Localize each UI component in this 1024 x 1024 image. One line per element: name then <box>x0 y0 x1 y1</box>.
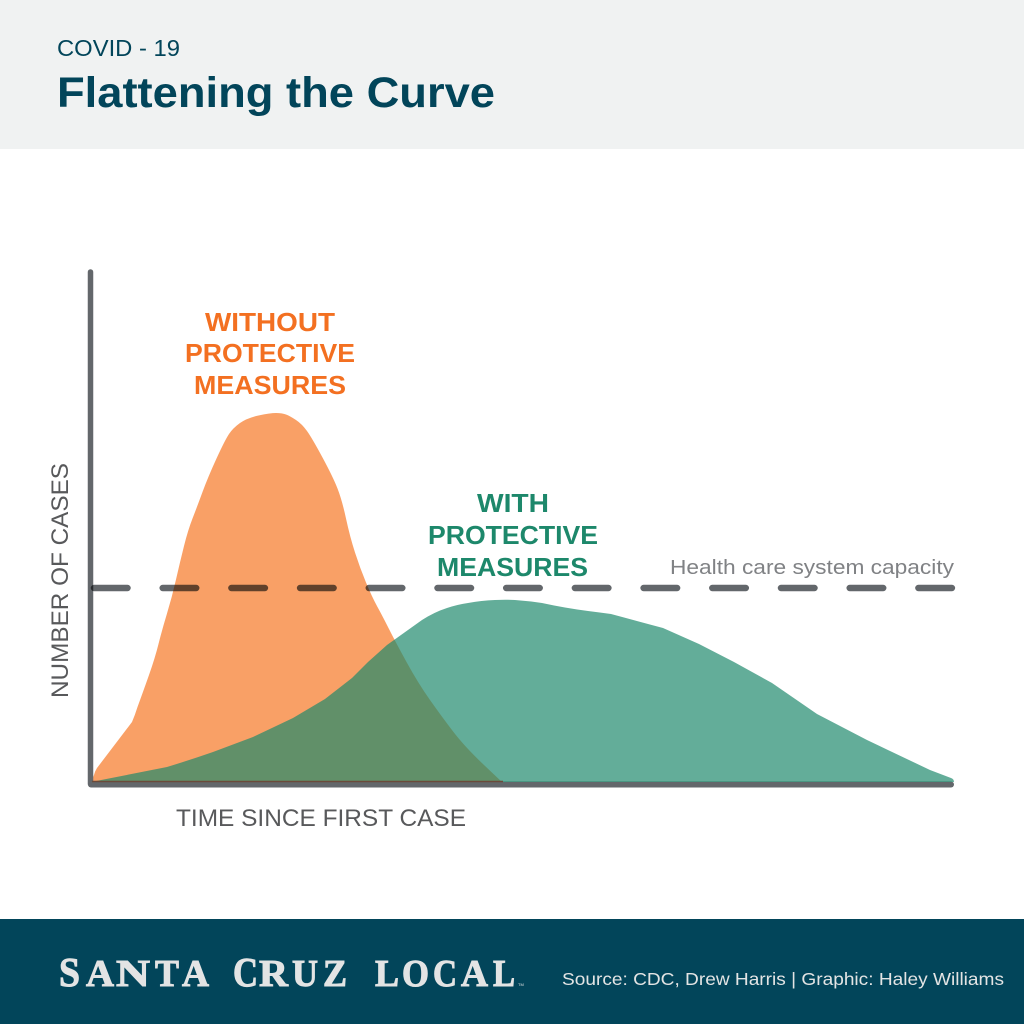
source credit: Source: CDC, Drew Harris | Graphic: Haley Williams <box>562 969 1004 989</box>
green curve: with protective measures <box>91 600 954 782</box>
subtitle: COVID - 19 <box>57 35 180 61</box>
label: with protective measures: PROTECTIVE <box>428 520 598 550</box>
logo wordmark: S <box>59 949 80 995</box>
footer band <box>0 919 1024 1024</box>
logo wordmark: C <box>233 949 258 995</box>
logo wordmark: L <box>375 953 399 995</box>
overlap baseline <box>92 780 503 782</box>
logo wordmark: U <box>292 953 318 995</box>
label: without protective measures: PROTECTIVE <box>185 338 355 368</box>
label: without protective measures: MEASURES <box>194 370 346 400</box>
title: Flattening the Curve <box>57 69 495 117</box>
label: without protective measures <box>185 307 355 400</box>
logo wordmark: Z <box>323 953 347 995</box>
logo wordmark: L <box>493 953 515 995</box>
trademark mark: TM <box>518 982 524 987</box>
logo wordmark: R <box>259 953 289 995</box>
logo wordmark: A <box>182 953 210 995</box>
logo wordmark: A <box>461 953 489 995</box>
label: with protective measures <box>428 488 598 582</box>
logo wordmark: C <box>433 953 457 995</box>
label: health care system capacity: Health care system capacity <box>670 557 954 579</box>
logo wordmark: O <box>402 953 429 995</box>
logo wordmark <box>59 949 515 995</box>
logo wordmark: A <box>86 953 115 995</box>
y axis label: NUMBER OF CASES <box>47 463 74 698</box>
vertical axis <box>88 272 93 784</box>
chart: flattening the curve <box>47 272 954 832</box>
orange curve: without protective measures <box>91 413 503 783</box>
logo wordmark: T <box>155 953 179 995</box>
label: with protective measures: WITH <box>477 488 549 518</box>
logo wordmark: N <box>116 953 150 995</box>
label: with protective measures: MEASURES <box>437 552 588 582</box>
label: without protective measures: WITHOUT <box>205 307 335 337</box>
header band <box>0 0 1024 149</box>
capacity dashed line <box>94 585 954 591</box>
x axis label: TIME SINCE FIRST CASE <box>176 805 466 832</box>
horizontal axis <box>91 782 951 788</box>
